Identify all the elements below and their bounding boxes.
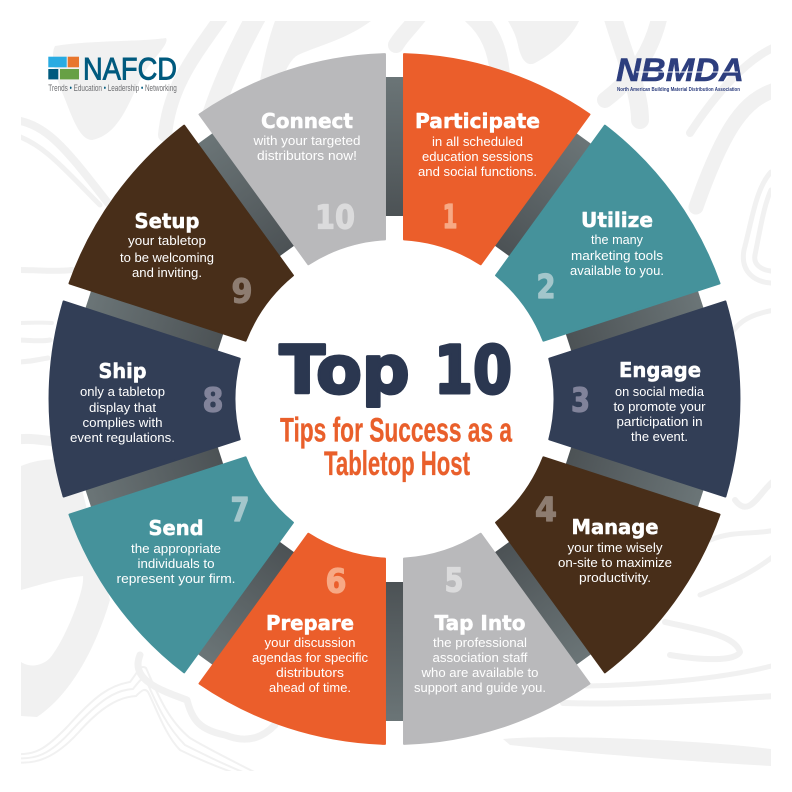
text: Prepare details: ahead of time. [269,680,351,695]
text: Engage details [614,384,706,444]
text: Manage details: your time wisely [568,540,663,555]
text: Engage details: to promote your [614,399,706,414]
number 9: 9 [232,272,252,310]
text: Prepare details [252,635,368,695]
text: Tap Into details: who are available to [420,665,538,680]
NAFCD tagline: Trends • Education • Leadership • Networking [48,83,177,94]
heading: Ship: Ship [98,359,146,383]
text: Engage details: participation in [616,414,702,429]
number 6: 6 [326,562,346,600]
text: Setup details: your tabletop [128,233,206,248]
text: Participate details: in all scheduled [432,134,523,149]
subtitle: Tabletop Host [324,445,470,483]
panel: tip 2 Utilize [462,117,731,387]
heading: Connect: Connect [261,109,353,133]
subtitle: Tips for Success as a [280,412,513,450]
text: Utilize details: the many [591,232,643,247]
text: Engage details: on social media [615,384,705,399]
logo: NBMDA [616,52,744,93]
text: Utilize details: marketing tools [571,248,664,263]
panel: tip 6 Prepare [195,516,439,757]
text: Utilize details: available to you. [570,263,664,278]
panel: tip 7 Send [58,411,327,681]
text: Setup details: and inviting. [132,265,202,280]
text: Ship details: display that [89,400,156,415]
center white circle [228,233,560,565]
text: Participate details: and social functions. [418,164,537,179]
text: Setup details [120,233,214,280]
heading: Setup: Setup [134,209,200,233]
connector bars between segments [85,77,704,721]
NBMDA association name: North American Building Material Distribution Association [617,87,740,93]
text: Manage details: productivity. [579,570,651,585]
text: Engage details: the event. [631,429,688,444]
NBMDA wordmark: NBMDA [616,52,744,88]
text: Tap Into details [414,635,546,695]
panel: tip 5 Tap Into [350,516,594,757]
icon: NAFCD coloured squares [48,57,79,79]
text: Participate details [418,134,537,179]
text: Prepare details: your discussion [264,635,356,650]
panel: tip 4 Manage [462,411,731,681]
text: Connect details: distributors now! [257,148,357,163]
text: Prepare details: distributors [276,665,345,680]
text: Manage details: on-site to maximize [558,555,672,570]
heading: Prepare: Prepare [266,611,354,635]
text: Connect details: with your targeted [252,133,360,148]
NBMDA stripe [636,72,738,73]
text: Manage details [558,540,672,585]
text: Send details: individuals to [138,556,214,571]
text: Ship details: complies with [82,415,162,430]
number 7: 7 [230,490,250,529]
logo: NAFCD [48,50,177,94]
number 10: 10 [315,198,355,236]
heading: Manage: Manage [572,515,658,539]
text: Ship details [70,384,175,445]
title: Top 10: 10 [434,332,512,409]
text: Tap Into details: support and guide you. [414,680,546,695]
title: Top 10 [280,332,512,409]
panel: tip 3 Engage [549,302,739,496]
number 2: 2 [536,267,556,306]
heading: Send: Send [148,516,204,540]
text: Send details: represent your firm. [116,571,236,586]
text: Send details: the appropriate [131,541,221,556]
text: Ship details: event regulations. [70,430,175,445]
panel: tip 10 Connect [195,41,439,282]
text: Participate details: education sessions [422,149,533,164]
text: Tap Into details: the professional [433,635,527,650]
panel: tip 9 Setup [58,117,327,387]
number 5: 5 [444,560,464,600]
text: Prepare details: agendas for specific [252,650,368,665]
panel: tip 1 Participate [350,41,594,282]
text: Ship details: only a tabletop [80,384,165,399]
panel: tip 8 Ship [50,302,240,496]
number 4: 4 [535,490,557,529]
text: Send details [116,541,236,586]
heading: Tap Into: Tap Into [434,611,526,635]
heading: Engage: Engage [619,358,701,382]
heading: Utilize: Utilize [581,208,653,232]
subtitle [280,412,513,483]
title: Top 10: Top [280,332,410,409]
NAFCD wordmark: NAFCD [83,50,177,86]
text: Tap Into details: association staff [432,650,528,665]
number 3: 3 [571,380,590,420]
number 1: 1 [442,197,458,236]
text: Setup details: to be welcoming [120,250,214,265]
heading: Participate: Participate [415,109,540,133]
text: Utilize details [570,232,664,278]
number 8: 8 [202,380,224,420]
text: Connect details [252,133,360,163]
